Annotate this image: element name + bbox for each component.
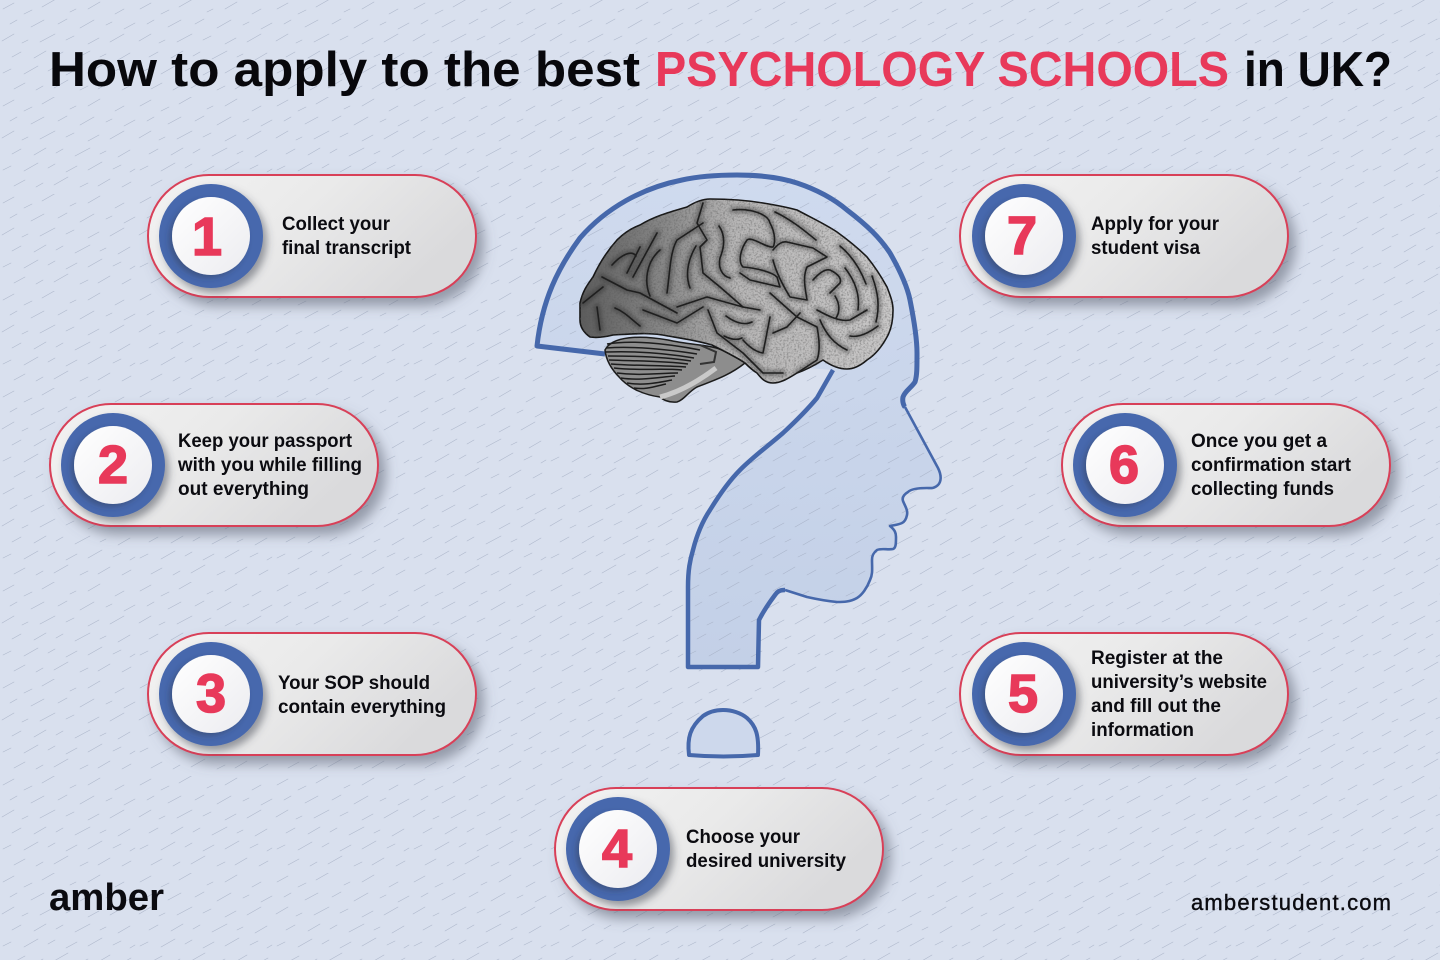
step 3 pill: 3 — [196, 664, 226, 724]
step 2 pill: 2 — [98, 435, 128, 495]
cerebrum — [580, 199, 893, 383]
step 6 pill: collecting funds — [1191, 479, 1334, 500]
question mark head silhouette — [537, 175, 941, 756]
step 4 pill: 4 — [602, 819, 632, 879]
step 5 pill: university’s website — [1091, 672, 1267, 693]
cerebellum — [605, 337, 745, 402]
step 5 pill: Register at the — [1091, 648, 1223, 669]
step 2 pill — [50, 404, 378, 526]
step 5 pill: information — [1091, 720, 1194, 741]
step 4 pill: Choose your — [686, 827, 801, 848]
step 2 pill: out everything — [178, 479, 309, 500]
title: in UK? — [1244, 43, 1392, 97]
step 6 pill — [1062, 404, 1390, 526]
step 6 pill: 6 — [1109, 435, 1139, 495]
step 4 pill — [555, 788, 883, 910]
title: PSYCHOLOGY SCHOOLS — [655, 43, 1229, 97]
step 3 pill — [148, 633, 476, 755]
step 6 pill: confirmation start — [1191, 455, 1352, 476]
step 1 pill: 1 — [192, 207, 222, 267]
question mark dot — [688, 710, 758, 756]
step 5 pill: and fill out the — [1091, 696, 1221, 717]
step 7 pill — [960, 175, 1288, 297]
icon: brain — [575, 195, 900, 402]
step 7 pill: student visa — [1091, 238, 1200, 259]
step 5 pill — [960, 633, 1288, 755]
step 1 pill: Collect your — [282, 214, 391, 235]
step 4 pill: desired university — [686, 851, 846, 872]
step 5 pill: 5 — [1008, 664, 1038, 724]
step 2 pill: Keep your passport — [178, 431, 353, 452]
step 7 pill: 7 — [1007, 206, 1037, 266]
step 7 pill: Apply for your — [1091, 214, 1220, 235]
website url: amberstudent.com — [1191, 890, 1391, 915]
step 1 pill — [148, 175, 476, 297]
step 3 pill: Your SOP should — [278, 673, 430, 694]
step 3 pill: contain everything — [278, 697, 446, 718]
step 1 pill: final transcript — [282, 238, 412, 259]
title — [49, 43, 1392, 97]
title: How to apply to the best — [49, 43, 640, 97]
logo: amber: amber — [49, 877, 164, 919]
step 2 pill: with you while filling — [177, 455, 362, 476]
step 6 pill: Once you get a — [1191, 431, 1327, 452]
